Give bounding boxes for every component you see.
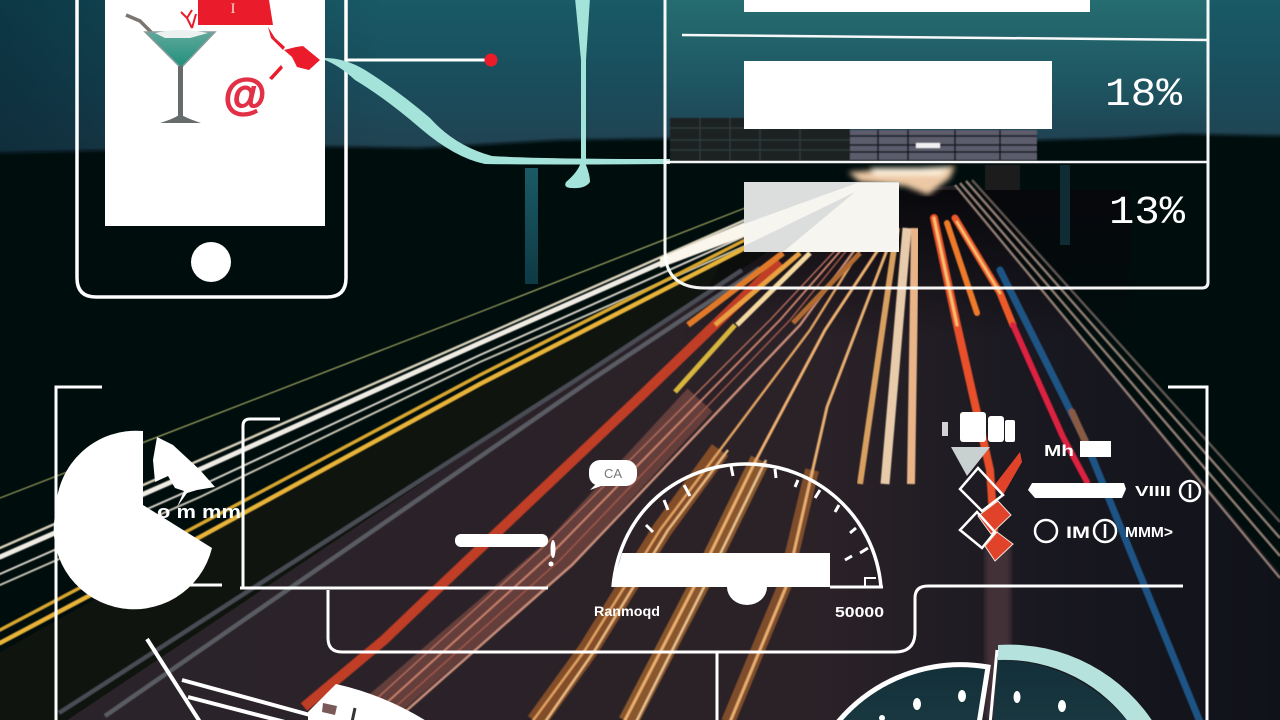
legend row one text: VIIII — [1135, 483, 1171, 500]
pie detached slice — [153, 437, 215, 507]
legend header blocks — [942, 412, 1015, 442]
phone bag label: I — [230, 1, 236, 17]
speech bubble: CA — [604, 466, 622, 481]
light burst at vanishing point — [848, 166, 955, 195]
phone screen — [105, 0, 325, 226]
light trails: red and pink bundles — [304, 240, 862, 718]
legend row one icon — [1180, 481, 1200, 501]
background: road darkening near horizon — [680, 190, 1130, 340]
dial teal rim — [998, 645, 1158, 720]
icon: triangle marker — [951, 447, 990, 476]
legend row two trailing text: MMM> — [1125, 524, 1173, 541]
pie baseline — [150, 584, 222, 586]
gauge baseline — [830, 586, 883, 588]
bottom dial chart — [836, 645, 1158, 720]
panel: lower outer frame — [56, 387, 1207, 720]
background: dusk sky — [0, 0, 1280, 170]
icon: red diamond two — [985, 532, 1013, 561]
bar: 13% — [744, 182, 899, 252]
panel: centre frame connector lines — [240, 419, 1183, 720]
legend small label: Mh — [1044, 443, 1074, 460]
speech bubble — [589, 460, 637, 490]
bar: 18% — [744, 61, 1052, 129]
phone home button — [191, 242, 231, 282]
light trails: grey right rails — [955, 180, 1280, 578]
icon: red bag — [181, 0, 320, 80]
light trails: pale centre streaks — [860, 228, 915, 484]
dial right half — [992, 660, 1134, 720]
background: grass median — [0, 205, 845, 720]
icon: outline diamond one — [960, 468, 1003, 511]
legend row two icon — [1035, 520, 1057, 542]
light trails: red right lanes — [934, 218, 1200, 720]
icon: red check — [993, 452, 1022, 495]
gauge filled band — [612, 553, 830, 587]
bar: top — [744, 0, 1090, 12]
icon: outline diamond two — [960, 512, 995, 548]
bar chart — [744, 0, 1186, 252]
icon: martini glass — [126, 15, 215, 123]
legend small label — [1044, 441, 1111, 460]
background: distant building — [670, 118, 1037, 193]
gauge inner notch — [865, 578, 876, 587]
phone outline — [77, 0, 346, 297]
value: 13%: 13% — [1109, 191, 1186, 236]
panel: bar chart frame — [665, 0, 1208, 288]
gauge arc — [613, 464, 881, 587]
gauge ticks — [646, 466, 868, 560]
pie label: o m mm — [157, 502, 241, 522]
background: road barriers — [59, 268, 760, 716]
dial dots — [879, 690, 1066, 720]
background: road surface — [60, 185, 1280, 720]
legend row two text: IM — [1066, 523, 1090, 542]
light trails: orange bands — [532, 250, 887, 720]
road reflection band — [985, 545, 1011, 720]
gauge max label: 50000 — [835, 604, 884, 621]
light trails: thin and white left lanes — [0, 208, 745, 585]
panel: right legend — [942, 412, 1200, 561]
dial divider — [990, 650, 997, 720]
legend long bar — [1028, 483, 1126, 498]
dial left half — [836, 665, 988, 720]
legend row two mid icon — [1094, 520, 1116, 542]
arrow: teal flowing ribbon — [325, 0, 670, 188]
background: teal roadside poles — [525, 165, 1070, 284]
gauge min label: Ranmoqd — [594, 603, 660, 619]
gauge — [594, 464, 884, 621]
label bar with exclamation — [455, 534, 556, 566]
light trails: yellow left lanes — [0, 240, 745, 643]
pie chart — [54, 431, 241, 609]
panel: smartphone — [77, 0, 346, 297]
value: 18%: 18% — [1105, 73, 1183, 118]
gauge hub — [727, 587, 767, 605]
icon: red diamond — [978, 501, 1011, 534]
icon: aircraft outline — [147, 639, 428, 720]
connector with red dot — [346, 54, 498, 66]
icon: at sign: @ — [224, 70, 266, 119]
